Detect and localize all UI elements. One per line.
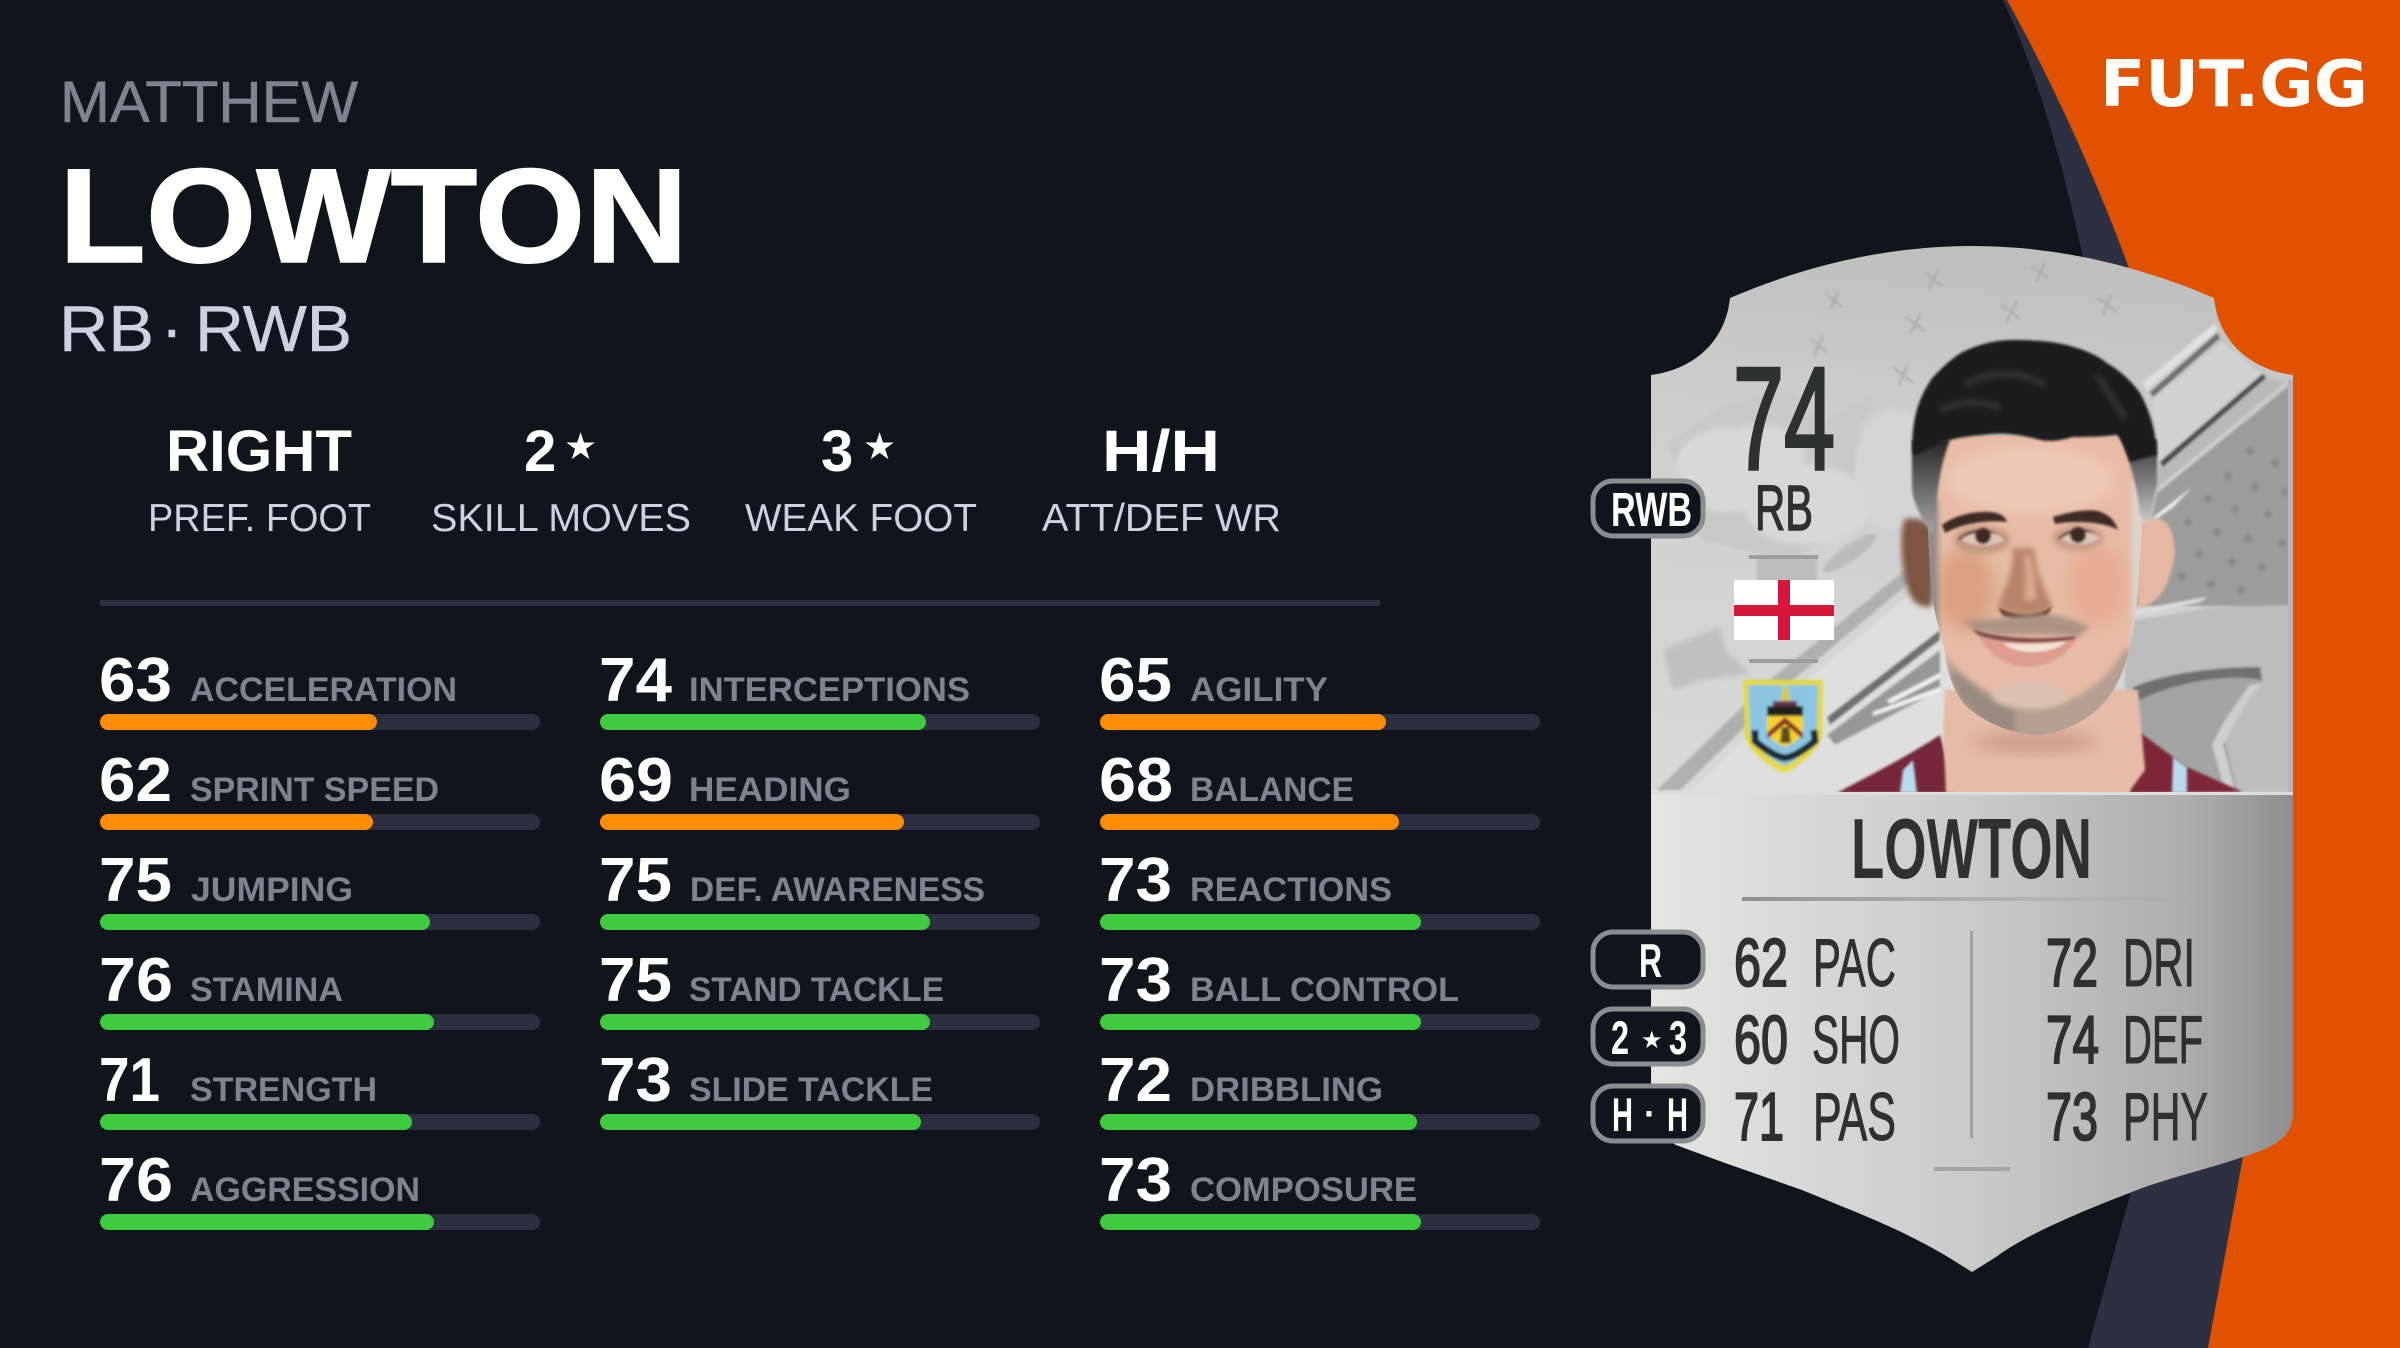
hair highlights [1940, 374, 2125, 418]
stat: balance: BALANCE [1190, 771, 1354, 809]
nose shadow [1998, 548, 2052, 615]
stat: agility [1099, 646, 1540, 730]
stat: acceleration: 63 [99, 646, 172, 715]
card right edge [2288, 380, 2293, 792]
flag shadow block [1756, 559, 1818, 580]
eyebrows [1942, 512, 2007, 533]
stat: def. awareness [599, 846, 1040, 930]
stat: stamina: STAMINA [190, 971, 343, 1009]
summary: work rates: H/H [1102, 419, 1220, 484]
attribute: DEF: 74 [2046, 1002, 2099, 1078]
stat: ball control: BALL CONTROL [1190, 971, 1459, 1009]
teeth [2003, 641, 2067, 652]
lower right shield panel [2125, 605, 2290, 792]
eyes [1958, 527, 2102, 546]
badge: alternative position: RWB [1611, 484, 1692, 537]
summary: weak foot: 3 [821, 419, 853, 484]
stat: sprint speed: SPRINT SPEED [190, 771, 439, 809]
stat: dribbling: DRIBBLING [1190, 1071, 1383, 1109]
ears [1902, 518, 1936, 607]
lower lip and smile [1978, 634, 2077, 668]
stat: composure [1099, 1146, 1540, 1230]
logo: FUT.GG: FUT.GG [2100, 48, 2368, 122]
neck [1943, 690, 2145, 793]
positions: RB [59, 292, 154, 365]
attribute: SHO: 60 [1734, 1002, 1788, 1078]
stat: dribbling [1099, 1046, 1540, 1130]
stat: strength: STRENGTH [190, 1071, 377, 1109]
stat: acceleration: ACCELERATION [190, 671, 457, 709]
stat: heading [599, 746, 1040, 830]
summary: skill moves: SKILL MOVES [431, 497, 691, 540]
stat: balance [1099, 746, 1540, 830]
panel dots [2177, 446, 2290, 595]
stat: reactions: REACTIONS [1190, 871, 1392, 909]
attribute: SHO [1734, 1002, 1900, 1078]
stat: strength [99, 1046, 540, 1130]
positions [59, 292, 352, 365]
badge: foot [1593, 932, 1703, 987]
stat: strength: 71 [99, 1046, 160, 1115]
position: RB [1755, 472, 1813, 544]
stat: def. awareness: 75 [599, 846, 672, 915]
badge: work rates: · [1644, 1093, 1656, 1134]
attribute: DEF: DEF [2123, 1002, 2203, 1078]
stat: stamina: 76 [99, 946, 173, 1015]
stat: interceptions [599, 646, 1040, 730]
stat: jumping [99, 846, 540, 930]
stat: ball control: 73 [1099, 946, 1172, 1015]
summary: skill moves [431, 419, 691, 540]
stat: aggression: 76 [99, 1146, 173, 1215]
badge: alternative position [1593, 481, 1703, 537]
attribute: PAC: 62 [1734, 925, 1788, 1001]
badge: work rates: H [1612, 1088, 1633, 1141]
stat: dribbling: 72 [1099, 1046, 1172, 1115]
stat: interceptions: 74 [599, 646, 673, 715]
club crest: Burnley [1743, 680, 1823, 773]
dark panel behind the player [2130, 385, 2290, 606]
stat: def. awareness: DEF. AWARENESS [690, 871, 985, 909]
stat: stand tackle [599, 946, 1040, 1030]
rating: 74 [1733, 337, 1835, 500]
stat: sprint speed: 62 [99, 746, 172, 815]
stat: jumping: 75 [99, 846, 172, 915]
first name: MATTHEW [60, 70, 358, 135]
summary: work rates: ATT/DEF WR [1042, 497, 1281, 540]
attribute: DRI [2046, 925, 2195, 1001]
card stars [1810, 264, 2116, 384]
summary: preferred foot [148, 419, 371, 540]
flag: England [1734, 580, 1834, 640]
stat: slide tackle: 73 [599, 1046, 672, 1115]
hair [1912, 340, 2157, 462]
attribute: PAC [1734, 925, 1896, 1001]
stat: ball control [1099, 946, 1540, 1030]
attribute: DEF [2046, 1002, 2203, 1078]
summary: skill moves: 2 [524, 419, 556, 484]
last name: LOWTON [59, 142, 688, 291]
stubble shadow [1946, 647, 2129, 735]
stat: jumping: JUMPING [191, 871, 353, 909]
lower star texture [1663, 627, 1750, 690]
badge: work rates [1593, 1086, 1703, 1141]
summary: skill moves: ★ [564, 425, 597, 468]
stat: aggression: AGGRESSION [190, 1171, 420, 1209]
background curve: orange panel [2007, 0, 2400, 1348]
badge: foot: R [1639, 934, 1662, 987]
summary: preferred foot: PREF. FOOT [148, 497, 371, 540]
attribute: DRI: DRI [2123, 925, 2195, 1001]
background curve: navy band [2003, 0, 2400, 1348]
diagonal streaks [1657, 323, 2290, 792]
stats column 1 [99, 646, 540, 1230]
summary: preferred foot: RIGHT [166, 419, 352, 484]
collar [1900, 757, 2187, 793]
attribute: PAS: PAS [1813, 1079, 1896, 1155]
attribute: PAS [1734, 1079, 1896, 1155]
card body [1640, 240, 2310, 1282]
stat: heading: HEADING [689, 771, 851, 809]
stat: stand tackle: STAND TACKLE [689, 971, 944, 1009]
attribute: DRI: 72 [2046, 925, 2098, 1001]
summary: weak foot [745, 419, 977, 540]
attribute: PAC: PAC [1813, 925, 1896, 1001]
positions: RWB [195, 292, 352, 365]
stat: slide tackle [599, 1046, 1040, 1130]
stat: agility: 65 [1099, 646, 1172, 715]
stat: agility: AGILITY [1190, 671, 1328, 709]
badge: skills and weak foot: 3 [1669, 1011, 1687, 1064]
badge: skills and weak foot [1593, 1009, 1703, 1064]
upper right streaks [2153, 342, 2260, 460]
attribute: SHO: SHO [1812, 1002, 1900, 1078]
summary: weak foot: ★ [863, 425, 896, 468]
stat: stamina [99, 946, 540, 1030]
attribute: PHY: PHY [2123, 1079, 2208, 1155]
player portrait [1837, 340, 2243, 793]
summary: work rates [1042, 419, 1281, 540]
hair sides [1912, 440, 1950, 535]
positions: · [161, 292, 183, 365]
player card [1593, 240, 2310, 1282]
moustache [1963, 614, 2090, 637]
badge: skills and weak foot: 2 [1611, 1011, 1629, 1064]
stat: balance: 68 [1099, 746, 1173, 815]
attribute: PHY: 73 [2046, 1079, 2098, 1155]
stat: interceptions: INTERCEPTIONS [689, 671, 970, 709]
nameplate: LOWTON [1851, 802, 2092, 897]
eye sockets [1954, 526, 2010, 554]
stat: stand tackle: 75 [599, 946, 672, 1015]
face [1925, 430, 2150, 745]
stats column 3 [1099, 646, 1540, 1230]
stat: acceleration [99, 646, 540, 730]
stat: slide tackle: SLIDE TACKLE [689, 1071, 933, 1109]
attribute: PHY [2046, 1079, 2208, 1155]
summary: weak foot: WEAK FOOT [745, 497, 977, 540]
stat: sprint speed [99, 746, 540, 830]
stat: reactions: 73 [1099, 846, 1172, 915]
stat: reactions [1099, 846, 1540, 930]
badge: skills and weak foot: ★ [1641, 1026, 1663, 1054]
stat: composure: 73 [1099, 1146, 1172, 1215]
jersey [1836, 732, 2244, 792]
stat: heading: 69 [599, 746, 673, 815]
stat: composure: COMPOSURE [1190, 1171, 1417, 1209]
attribute: PAS: 71 [1734, 1079, 1784, 1155]
badge: work rates: H [1667, 1088, 1688, 1141]
upper star texture [1699, 516, 1805, 555]
stats column 2 [599, 646, 1040, 1130]
stat: aggression [99, 1146, 540, 1230]
